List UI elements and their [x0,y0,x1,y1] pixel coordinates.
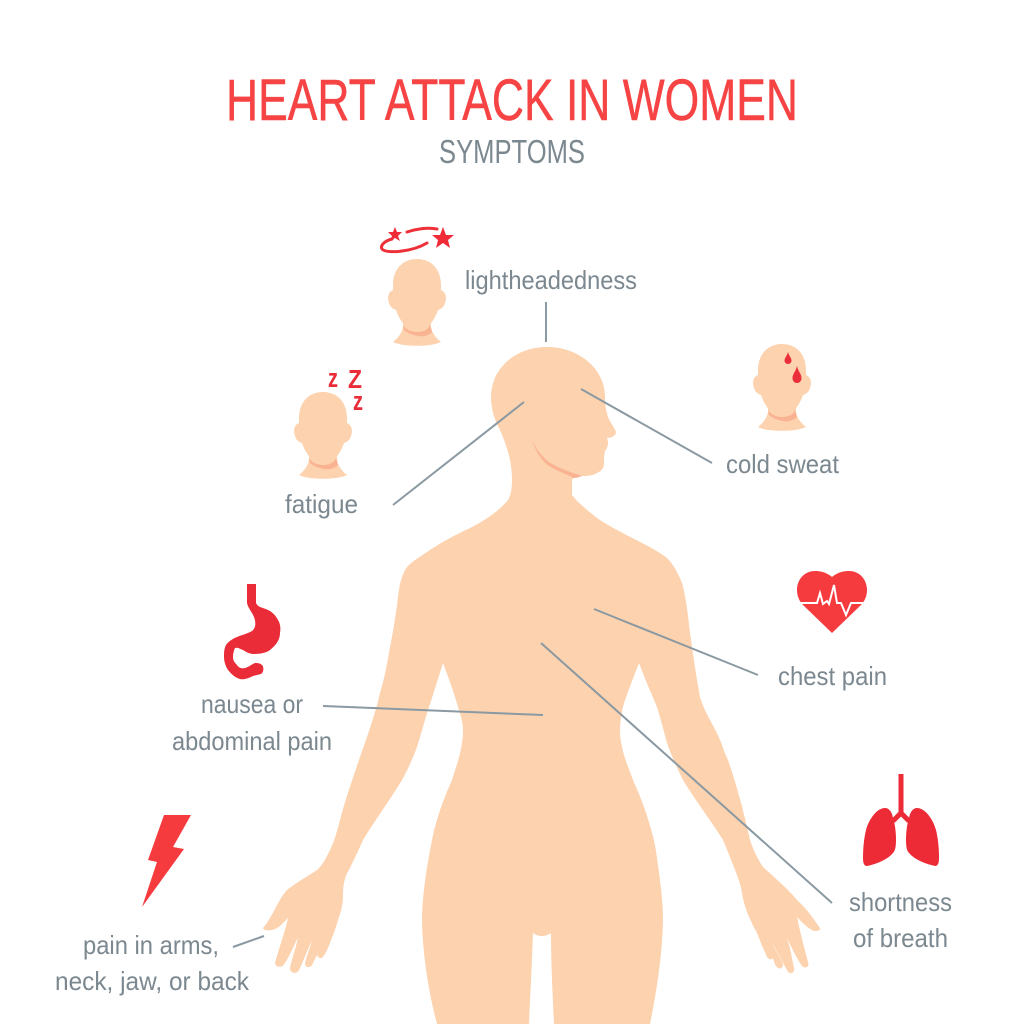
icon: lightning bolt [142,815,191,907]
subtitle: SYMPTOMS [439,133,585,170]
label: pain in arms, neck, jaw, or back: pain in arms, [83,930,219,960]
icon: lungs [863,774,939,866]
label: shortness of breath: of breath [853,923,948,953]
icon: sweating head [753,344,811,431]
label: cold sweat: cold sweat [726,449,840,479]
icon: sleepy head [294,363,363,479]
icon: dizzy head [381,227,454,346]
label: nausea or abdominal pain [172,689,332,756]
icon: sleepy head: Z [348,364,362,394]
label: lightheadedness: lightheadedness [465,265,637,295]
icon: heart with pulse [797,571,867,633]
leader lines [233,302,832,947]
body figure [263,347,820,1024]
icon: sleepy head: z [353,386,363,416]
jaw shadow [532,440,582,478]
icon: stomach [224,584,280,679]
label: shortness of breath: shortness [849,887,952,917]
label: nausea or abdominal pain: abdominal pain [172,726,332,756]
title: HEART ATTACK IN WOMEN [226,68,798,133]
icon: sleepy head: z [328,363,338,393]
label: pain in arms, neck, jaw, or back [55,930,250,996]
label: chest pain: chest pain [778,661,887,691]
label: nausea or abdominal pain: nausea or [201,689,303,719]
label: fatigue: fatigue [285,489,358,519]
label: pain in arms, neck, jaw, or back: neck, jaw, or back [55,966,250,996]
label: shortness of breath [849,887,952,953]
